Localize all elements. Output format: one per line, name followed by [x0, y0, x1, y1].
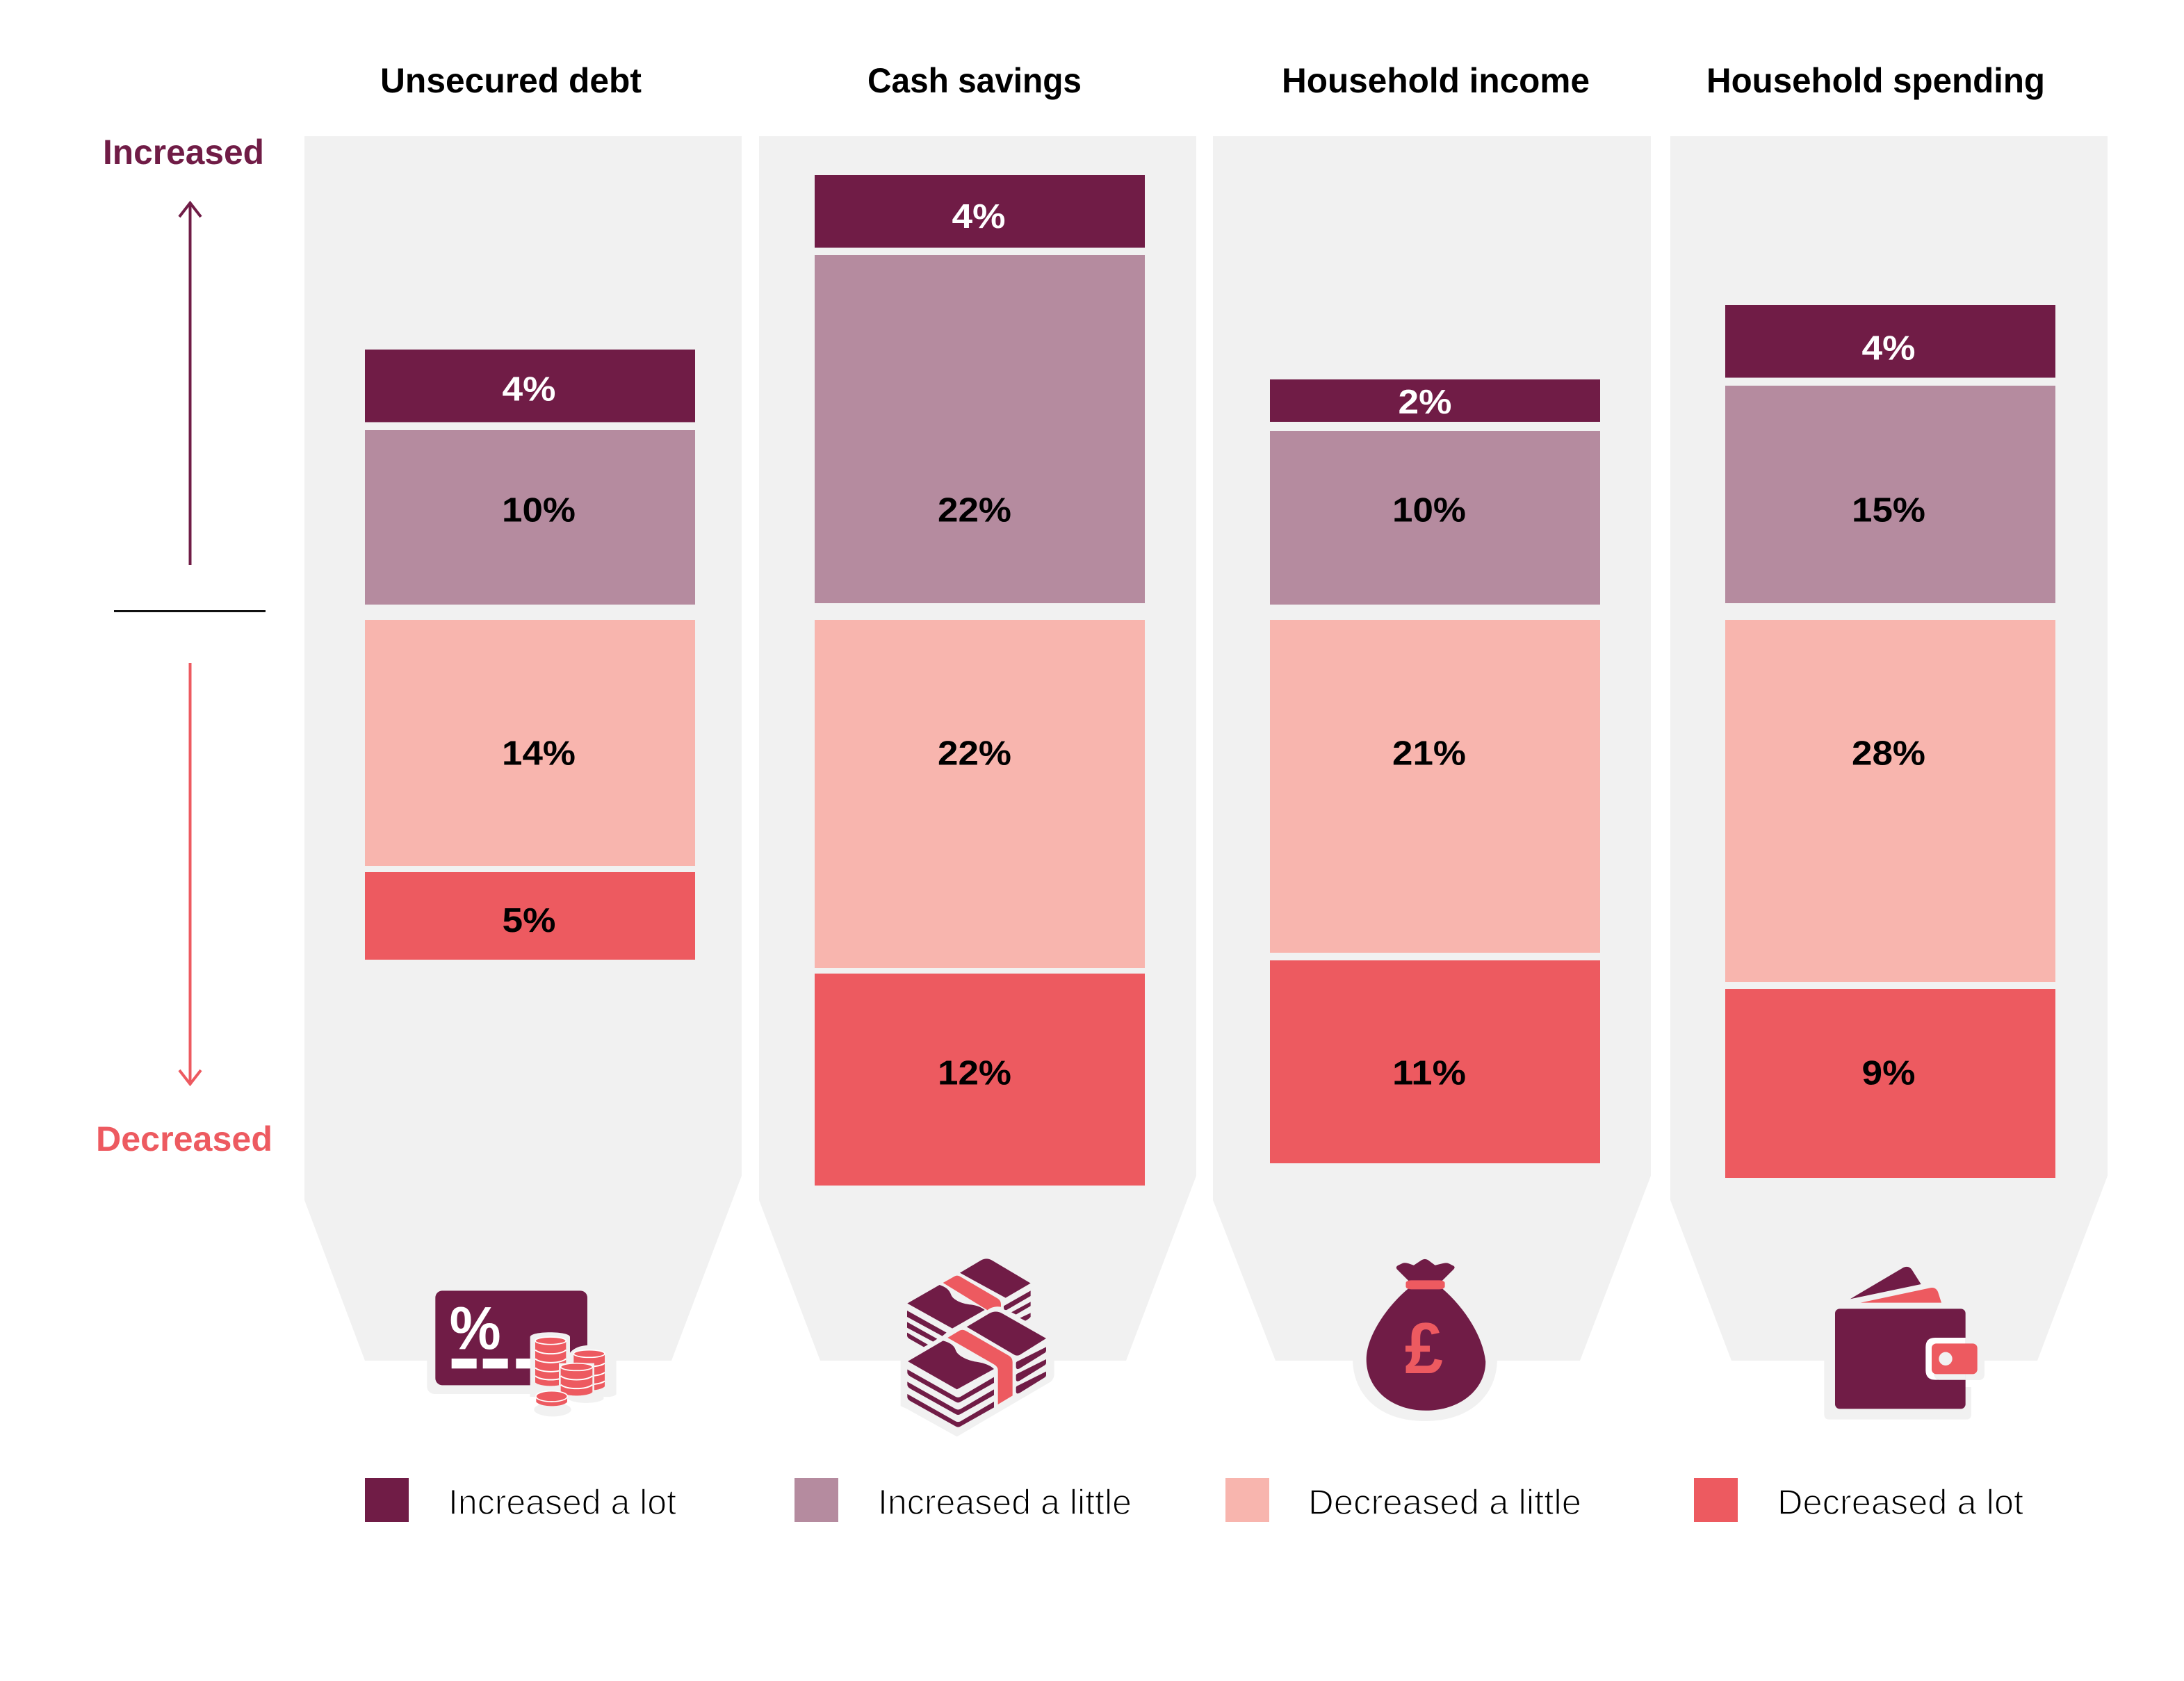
bar: increased a lot 4%: 4% [502, 371, 556, 409]
bar: increased a lot 2% [1270, 379, 1600, 422]
bar: decreased a lot 9% [1725, 989, 2055, 1178]
bar: decreased a little 21% [1270, 620, 1600, 953]
panel: household spending [1670, 136, 2108, 1361]
icon: wallet [1824, 1267, 1985, 1420]
bar: increased a lot 2%: 2% [1399, 384, 1451, 421]
icon: money bag with pound sign: £ [1405, 1309, 1443, 1389]
arrow: down [179, 663, 201, 1084]
bar: increased a little 22%: 22% [938, 492, 1011, 530]
legend: decreased a little [1225, 1478, 1581, 1522]
bar: increased a lot 4%: 4% [1861, 329, 1916, 367]
panel: cash savings [759, 136, 1196, 1361]
heading: household income: Household income [1282, 61, 1590, 100]
axis baseline [114, 610, 266, 612]
axis label: increased: Increased [103, 133, 264, 172]
axis label: decreased: Decreased [96, 1120, 272, 1158]
bar: decreased a little 14%: 14% [502, 735, 576, 773]
bar: increased a lot 4% [815, 175, 1145, 247]
bar: decreased a lot 12% [815, 974, 1145, 1186]
bar: decreased a lot 9%: 9% [1861, 1055, 1916, 1092]
legend: decreased a lot: Decreased a lot [1777, 1482, 2023, 1522]
legend: increased a little: Increased a little [878, 1482, 1132, 1522]
bar: decreased a lot 12%: 12% [938, 1055, 1011, 1092]
legend: increased a little [794, 1478, 1132, 1522]
bar: increased a little 15% [1725, 386, 2055, 603]
icon: money bag with pound sign [1353, 1259, 1497, 1421]
bar: increased a lot 4% [1725, 305, 2055, 378]
legend: decreased a lot [1694, 1478, 2023, 1522]
bar: increased a lot 4%: 4% [952, 198, 1005, 236]
panel: household income [1213, 136, 1651, 1361]
legend: increased a lot: Increased a lot [448, 1482, 676, 1522]
bar: decreased a lot 5%: 5% [502, 902, 556, 940]
bar: increased a little 15%: 15% [1852, 492, 1925, 530]
heading: household spending: Household spending [1706, 61, 2045, 100]
icon: bundles of banknotes [901, 1258, 1054, 1436]
bar: decreased a little 28% [1725, 620, 2055, 982]
bar: decreased a little 28%: 28% [1852, 735, 1925, 773]
bar: decreased a lot 5% [365, 872, 695, 960]
bar: decreased a little 14% [365, 620, 695, 866]
bar: decreased a little 22%: 22% [938, 735, 1011, 773]
bar: increased a little 10% [1270, 431, 1600, 605]
bar: decreased a little 21%: 21% [1392, 735, 1466, 773]
bar: increased a little 10% [365, 430, 695, 605]
arrow: up [179, 203, 201, 565]
icon: credit card with coins [427, 1290, 617, 1416]
bar: increased a little 10%: 10% [1392, 492, 1466, 530]
panel: unsecured debt [304, 136, 742, 1361]
bar: decreased a lot 11%: 11% [1392, 1055, 1466, 1092]
bar: decreased a lot 11% [1270, 960, 1600, 1163]
bar: increased a little 10%: 10% [502, 492, 576, 530]
heading: cash savings: Cash savings [867, 61, 1082, 100]
legend: decreased a little: Decreased a little [1308, 1482, 1581, 1522]
bar: increased a lot 4% [365, 350, 695, 423]
legend: increased a lot [365, 1478, 676, 1522]
heading: unsecured debt: Unsecured debt [380, 61, 642, 100]
bar: decreased a little 22% [815, 620, 1145, 968]
bar: increased a little 22% [815, 255, 1145, 603]
legend [365, 1478, 2023, 1522]
icon: credit card with coins: % [450, 1294, 501, 1362]
